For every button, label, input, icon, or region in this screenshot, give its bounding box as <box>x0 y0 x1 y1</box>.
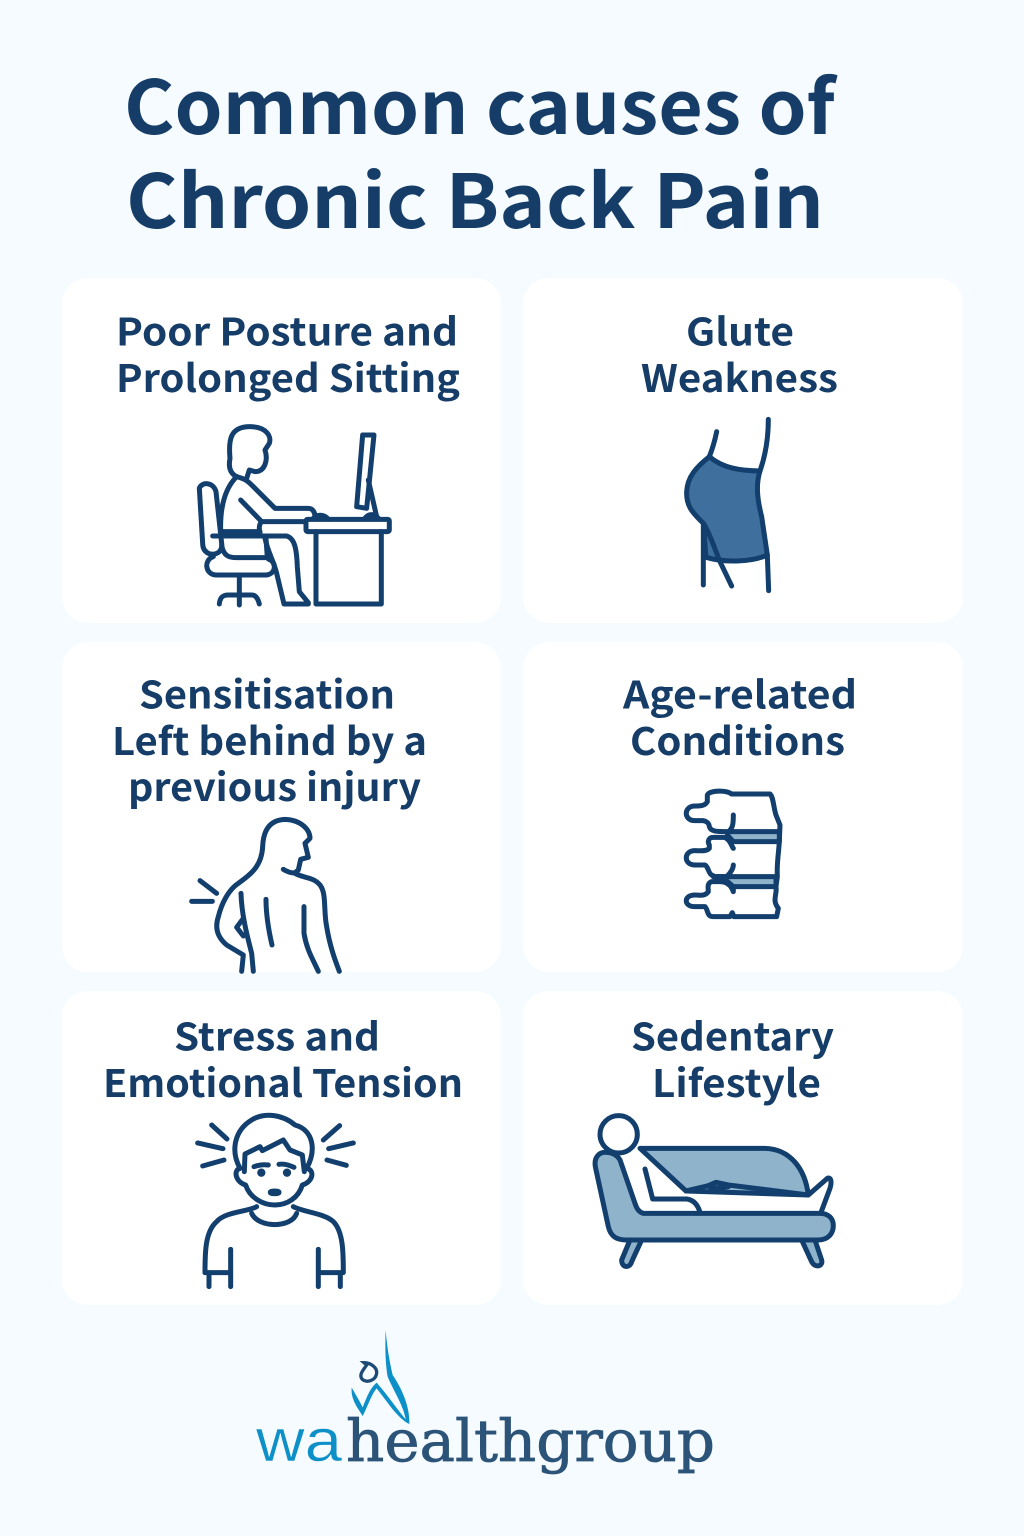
panel heading: sensitisation: previous injury <box>128 757 421 812</box>
logo: WA Health Group <box>255 1330 715 1475</box>
icon: spine vertebrae <box>686 791 780 917</box>
panel heading: age-related conditions: Conditions <box>630 711 845 766</box>
icon: person lying on sofa <box>595 1116 833 1266</box>
panel heading: stress: Stress and <box>174 1006 380 1062</box>
panel: sedentary lifestyle <box>523 991 963 1305</box>
panel heading: sedentary lifestyle <box>631 1006 834 1108</box>
panel heading: glute weakness: Weakness <box>641 348 838 403</box>
panel heading: sensitisation: Left behind by a <box>112 711 427 766</box>
panel heading: glute weakness: Glute <box>686 302 794 356</box>
icon: back with pain marks <box>192 819 339 971</box>
panel heading: poor posture: Poor Posture and <box>116 302 458 356</box>
panel heading: stress: Emotional Tension <box>103 1053 463 1108</box>
panel heading: age-related conditions: Age-related <box>622 664 857 720</box>
title <box>124 49 838 250</box>
panel heading: glute weakness <box>641 302 838 403</box>
panel heading: poor posture <box>116 302 460 403</box>
panel: poor posture and prolonged sitting <box>62 278 501 623</box>
panel: age-related conditions <box>523 642 963 972</box>
panel: glute weakness <box>523 278 963 623</box>
panel heading: sensitisation: Sensitisation <box>139 664 395 720</box>
panel heading: stress <box>103 1006 463 1108</box>
panel: sensitisation <box>62 642 501 972</box>
panel heading: poor posture: Prolonged Sitting <box>116 348 460 403</box>
panel heading: sedentary lifestyle: Sedentary <box>631 1006 834 1062</box>
icon: person sitting at desk <box>199 427 389 605</box>
logo wordmark: wa <box>255 1407 343 1474</box>
title: Chronic Back Pain <box>126 143 824 250</box>
panel heading: age-related conditions <box>622 664 857 766</box>
title: Common causes of <box>124 49 838 156</box>
icon: glute <box>687 419 769 591</box>
panel: stress and emotional tension <box>62 991 501 1305</box>
logo wordmark: healthgroup <box>346 1407 715 1475</box>
panel heading: sedentary lifestyle: Lifestyle <box>652 1053 821 1108</box>
panel heading: sensitisation <box>112 664 427 812</box>
icon: stressed person <box>198 1115 353 1287</box>
logo icon: figure <box>352 1330 409 1424</box>
